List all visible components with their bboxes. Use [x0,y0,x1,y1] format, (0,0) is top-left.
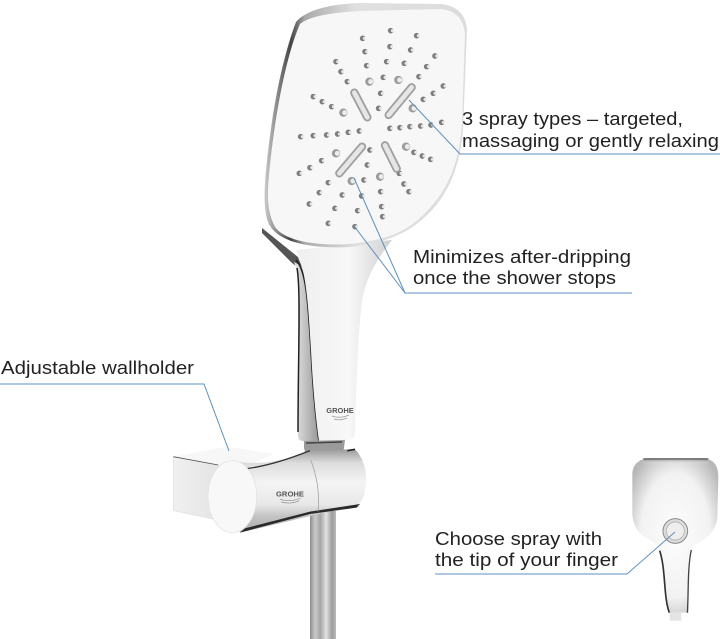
callout: choose spray [435,528,675,574]
callout: spray types [409,100,720,154]
callout: wallholder [0,357,229,451]
GROHE logo on handle: GROHE [326,406,354,415]
callout: after-dripping: Minimizes after-dripping [413,246,631,267]
handle shoulder chrome [262,228,304,272]
hand shower handle [262,228,392,441]
callout: choose spray: Choose spray with [435,528,602,549]
pipe [310,511,336,639]
callout: after-dripping: once the shower stops [413,267,616,288]
spray button [663,519,688,543]
wallholder round cap [208,461,257,533]
callout: after-dripping [354,178,632,293]
callout: spray types: 3 spray types – targeted, [462,108,683,129]
head rim [265,3,467,247]
callout: spray types: massaging or gently relaxing [462,130,719,151]
wallholder swivel [232,449,366,533]
GROHE logo on holder: GROHE [276,490,304,499]
head face [268,9,465,244]
connector [304,440,345,456]
wallholder [173,447,366,533]
spray nozzles [299,31,445,227]
GROHE logo on holder [276,490,304,503]
callout: wallholder: Adjustable wallholder [1,357,194,378]
small hand shower [632,458,718,621]
callout: choose spray: the tip of your finger [435,549,618,570]
GROHE logo on handle [326,406,354,420]
shower head [265,3,467,247]
wallholder block [173,447,273,470]
